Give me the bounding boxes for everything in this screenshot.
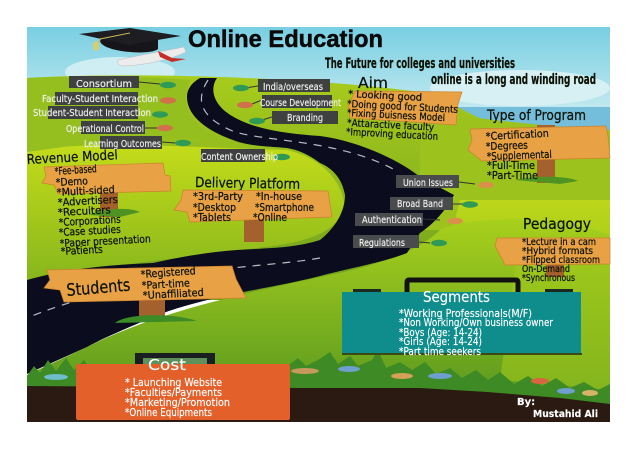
left labels: consortium group: Operational Control	[66, 124, 144, 135]
subtitle	[325, 56, 596, 88]
panel: revenue model: *Paper presentation	[60, 233, 151, 250]
panel: type of program: *Certification	[486, 128, 549, 143]
panel: pedagogy: *Lecture in a cam	[522, 237, 596, 248]
title: Online Education	[188, 26, 383, 53]
left labels: consortium group: Faculty-Student Interaction	[42, 94, 158, 105]
panel: aim: *Doing good for Students	[347, 99, 458, 116]
panel: segments: *Girls (Age: 14-24)	[399, 336, 482, 348]
panel: delivery platform: *Tablets	[193, 212, 231, 224]
panel: pedagogy: *Flipped classroom	[522, 255, 600, 266]
panel: pedagogy	[495, 215, 610, 284]
panel: revenue model	[26, 147, 171, 258]
top-center labels: India/overseas	[263, 82, 323, 93]
panel: delivery platform: Delivery Platform	[195, 175, 300, 193]
panel: revenue model: *Patients	[61, 244, 103, 258]
panel: type of program: Type of Program	[486, 108, 586, 124]
top-center labels: Branding	[287, 113, 323, 124]
left labels: consortium group: Student-Student Interaction	[33, 108, 151, 119]
panel: revenue model: *Advertisers	[58, 194, 118, 209]
panel: aim: *Fixing buisness Model	[347, 108, 445, 124]
panel: delivery platform: *Online	[253, 212, 287, 224]
road labels: Authentication	[362, 215, 422, 226]
panel: cost: *Faculties/Payments	[125, 387, 222, 399]
road labels: Regulations	[359, 238, 405, 249]
panel: delivery platform: *Smartphone	[255, 202, 314, 214]
panel: segments: *Boys (Age: 14-24)	[399, 327, 482, 339]
panel: pedagogy: *Synchronous	[522, 273, 575, 284]
panel: segments: *Non Working/Own business owner	[399, 317, 554, 329]
panel: revenue model: *Demo	[56, 175, 88, 189]
panel: pedagogy: Pedagogy	[523, 215, 591, 233]
panel: type of program: *Degrees	[486, 140, 528, 153]
panel: cost	[76, 353, 290, 420]
winding road	[27, 78, 454, 374]
panel: cost: *Online Equipments	[125, 407, 212, 419]
panel: students: *Unaffiliated	[143, 287, 204, 302]
panel: cost: *Marketing/Promotion	[125, 397, 230, 409]
panel: pedagogy: On-Demand	[522, 264, 570, 275]
top-center labels	[233, 79, 341, 124]
icon: graduation cap and diploma	[79, 28, 186, 66]
left labels: consortium group: Learning Outcomes	[84, 139, 161, 150]
panel: delivery platform: *3rd-Party	[193, 191, 243, 203]
road labels: Union Issues	[403, 178, 453, 189]
author credit: By:	[517, 397, 535, 408]
green hills	[27, 75, 610, 395]
panel: segments: Segments	[423, 288, 490, 306]
panel: revenue model: *Fee-based	[54, 163, 97, 178]
panel: aim	[346, 74, 462, 143]
label: content ownership: Content Ownership	[201, 152, 278, 163]
panel: revenue model: *Multi-sided	[57, 184, 115, 199]
panel: segments: *Part time seekers	[399, 346, 481, 358]
road labels: Broad Band	[397, 199, 443, 210]
road labels	[353, 175, 494, 249]
panel: revenue model: *Case studies	[59, 224, 121, 239]
grass and soil	[27, 350, 610, 422]
panel: cost: * Launching Website	[125, 377, 222, 389]
author credit	[517, 397, 598, 420]
sky background	[27, 27, 610, 133]
top-center labels: Course Development	[260, 98, 341, 109]
panel: pedagogy: *Hybrid formats	[522, 246, 593, 257]
panel: students: Students	[66, 275, 131, 301]
panel: delivery platform: *Desktop	[193, 202, 236, 214]
panel: aim: * Looking good	[348, 89, 422, 104]
panel: segments: *Working Professionals(M/F)	[399, 308, 532, 320]
left labels: consortium group	[33, 76, 191, 150]
panel: aim: Aim	[358, 74, 388, 92]
panel: revenue model: *Corporations	[59, 214, 121, 229]
left labels: consortium group: Consortium	[76, 79, 132, 90]
panel: students	[44, 265, 246, 323]
panel: students: *Registered	[140, 265, 196, 281]
panel: revenue model: Revenue Model	[26, 147, 118, 168]
subtitle: The Future for colleges and universities	[325, 56, 515, 72]
panel: revenue model: *Recuiters	[58, 204, 111, 219]
panel: type of program: *Part-Time	[487, 170, 538, 182]
panel: segments	[342, 280, 582, 358]
panel: delivery platform	[174, 175, 332, 242]
panel: students: *Part-time	[142, 278, 190, 292]
panel: delivery platform: *In-house	[256, 191, 302, 203]
panel: aim: *Attaractive faculty	[347, 118, 434, 134]
author credit: Mustahid Ali	[533, 409, 598, 420]
panel: aim: *Improving education	[346, 127, 438, 143]
panel: type of program: *Supplemental	[487, 149, 552, 163]
panel: type of program	[468, 108, 610, 184]
panel: cost: Cost	[148, 356, 186, 374]
panel: type of program: *Full-Time	[487, 160, 535, 172]
